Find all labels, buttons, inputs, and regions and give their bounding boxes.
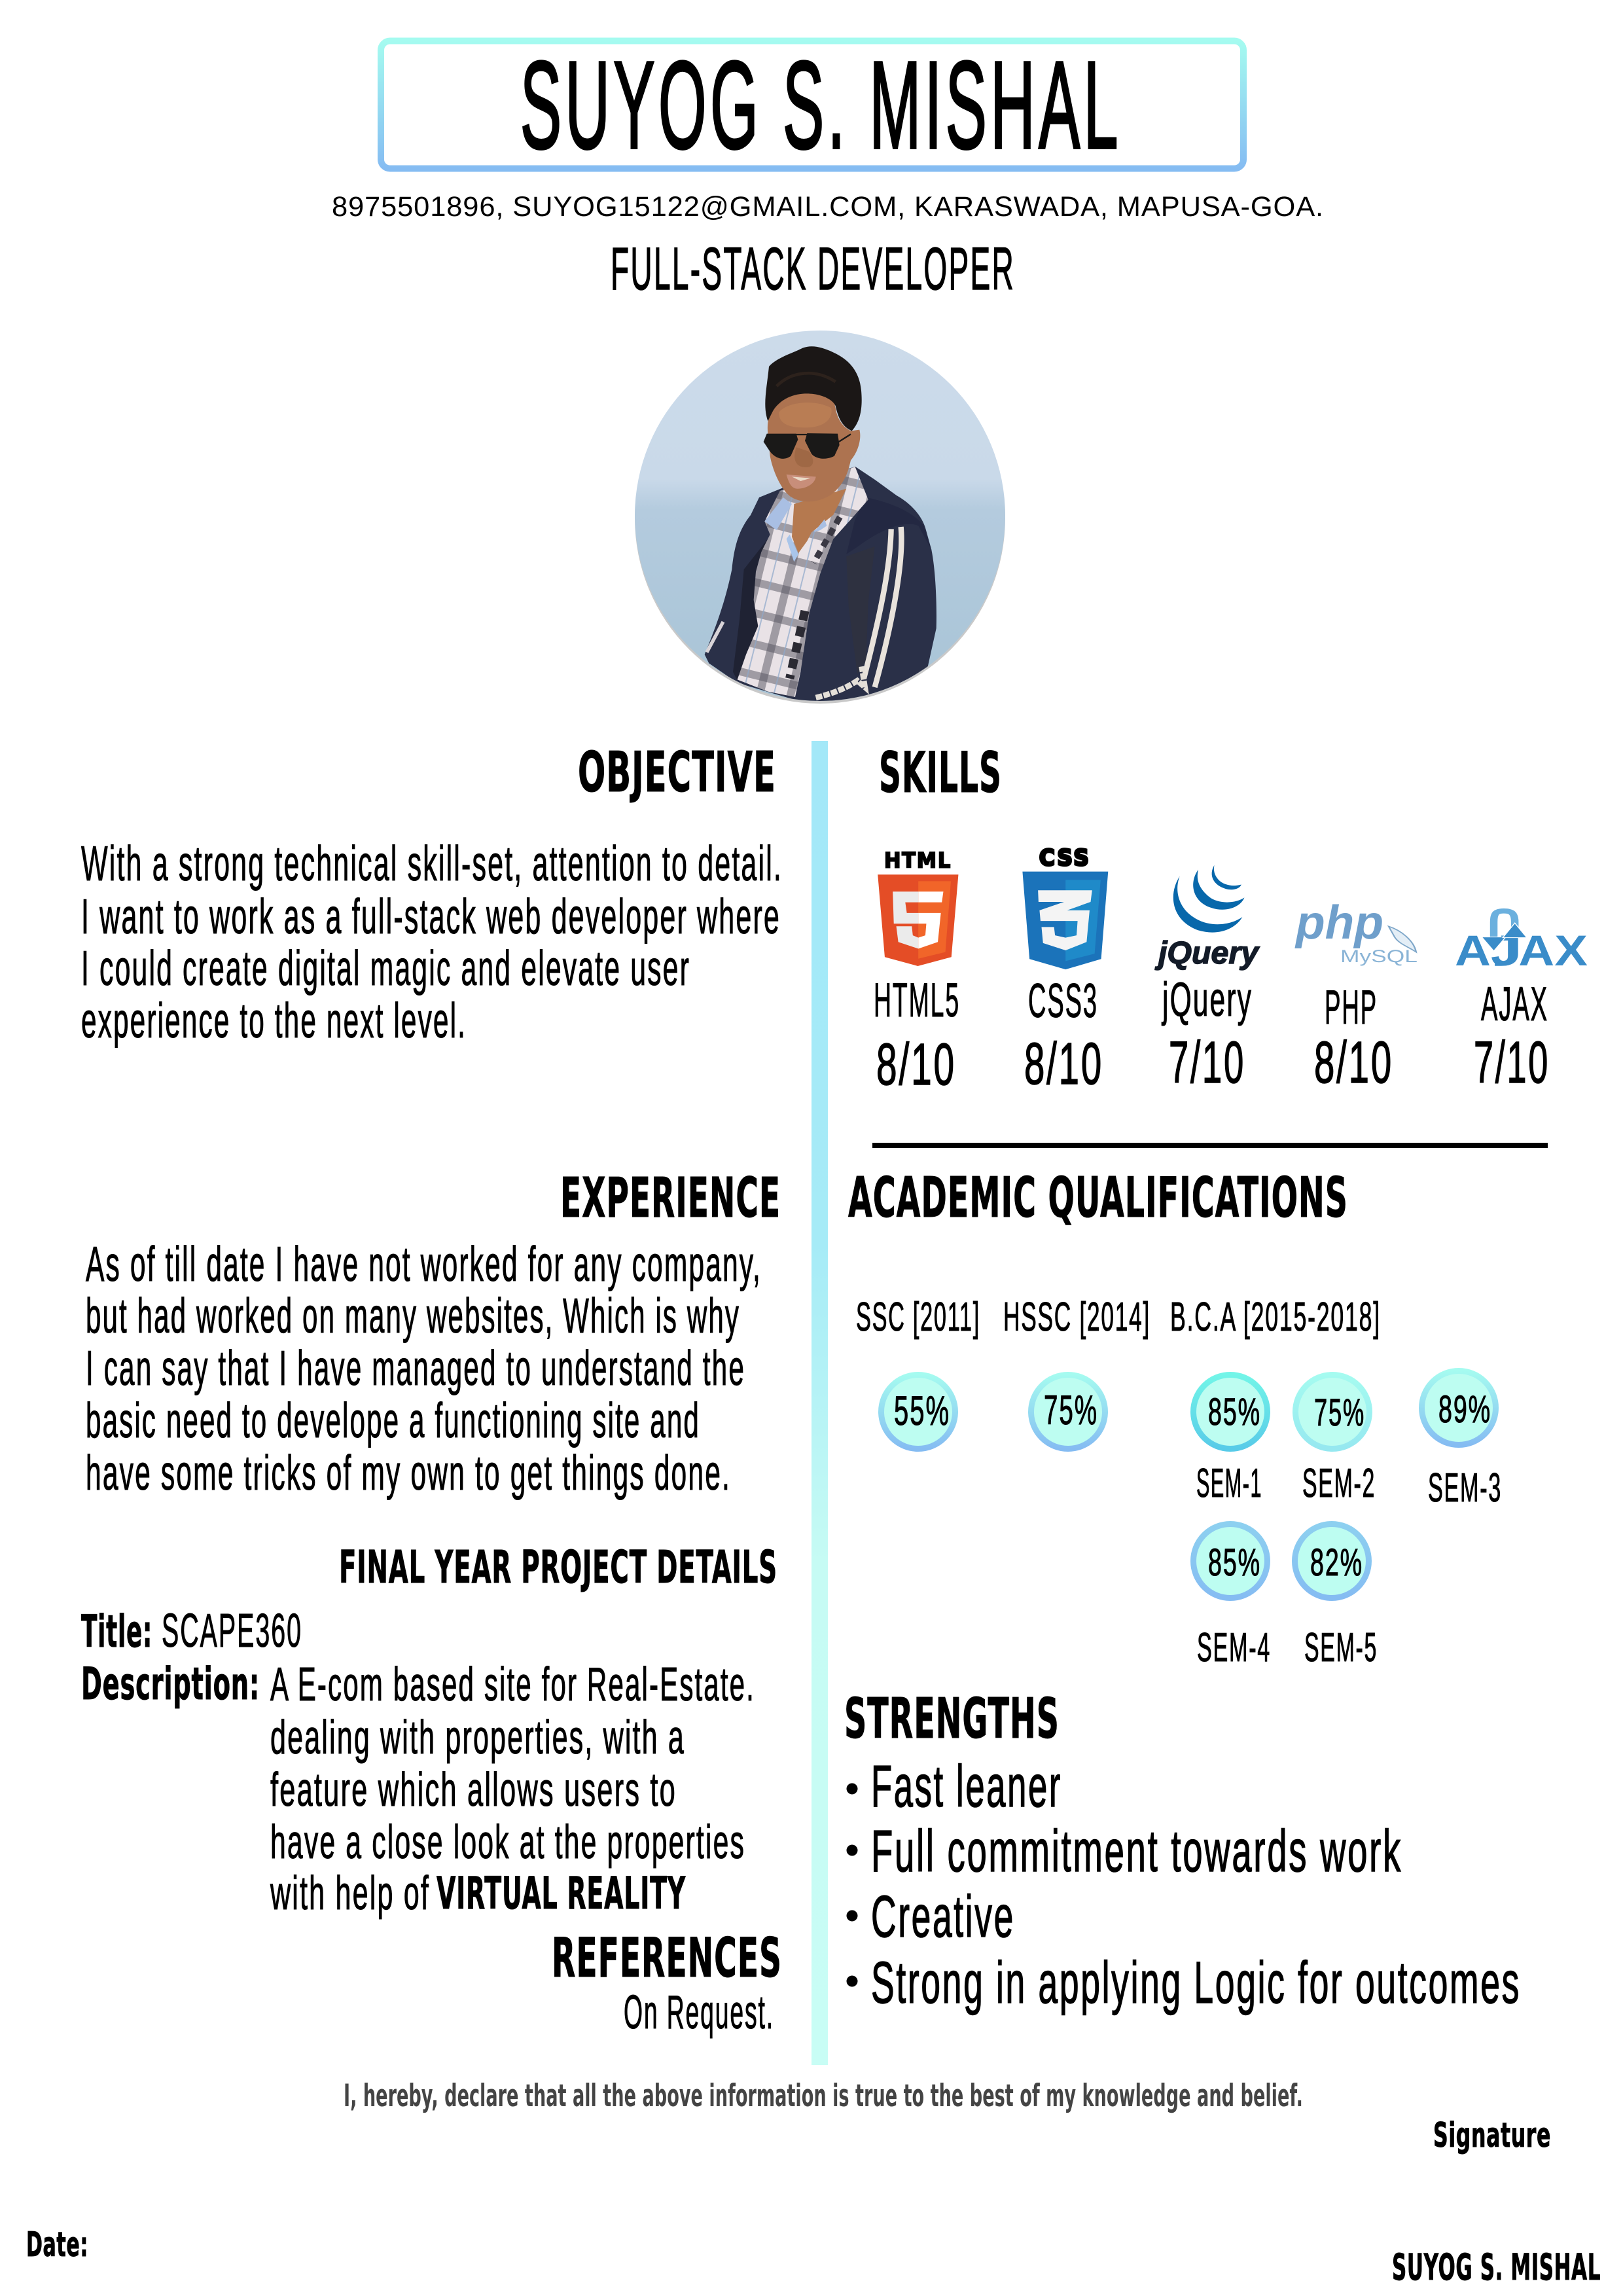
semester labels: SEM-1 bbox=[1196, 1461, 1262, 1506]
panel: experience bbox=[86, 1166, 781, 1500]
skill ratings: 7/10 bbox=[1169, 1030, 1245, 1096]
score badge: sem-3 bbox=[1421, 1371, 1496, 1445]
score badge: sem-4: 85% bbox=[1208, 1541, 1261, 1584]
heading: experience: EXPERIENCE bbox=[560, 1166, 781, 1230]
icon: ajax: AJAX bbox=[1455, 926, 1588, 975]
icon: ajax bbox=[1455, 911, 1588, 975]
skill ratings bbox=[876, 1030, 1550, 1098]
date label: Date: bbox=[26, 2225, 88, 2265]
semester labels: SEM-2 bbox=[1302, 1461, 1376, 1506]
icon: jquery bbox=[1154, 865, 1260, 971]
job title: FULL-STACK DEVELOPER bbox=[611, 236, 1015, 302]
objective text: I could create digital magic and elevate user bbox=[81, 941, 690, 996]
skill labels: CSS3 bbox=[1028, 975, 1098, 1028]
qualification labels: B.C.A [2015-2018] bbox=[1170, 1295, 1381, 1340]
project description: have a close look at the properties bbox=[270, 1816, 745, 1869]
project description: feature which allows users to bbox=[270, 1764, 677, 1816]
qualification labels: SSC [2011] bbox=[856, 1295, 980, 1340]
experience text: I can say that I have managed to understand the bbox=[86, 1340, 745, 1395]
icon: css3: CSS bbox=[1039, 845, 1091, 871]
semester labels: SEM-3 bbox=[1428, 1465, 1502, 1511]
score badge: sem-5: 82% bbox=[1310, 1541, 1363, 1584]
score badge: sem-2 bbox=[1296, 1374, 1369, 1449]
skill labels: jQuery bbox=[1162, 973, 1253, 1026]
icon: php mysql: MySQL bbox=[1340, 946, 1418, 966]
score badge: sem-1 bbox=[1194, 1374, 1267, 1449]
project title bbox=[81, 1605, 302, 1658]
objective text: I want to work as a full-stack web developer where bbox=[81, 889, 781, 944]
heading: skills: SKILLS bbox=[879, 740, 1002, 806]
skill labels: HTML5 bbox=[874, 974, 960, 1027]
objective text bbox=[81, 836, 783, 1048]
panel: references bbox=[552, 1926, 782, 2039]
qualification labels bbox=[856, 1295, 1381, 1340]
score badge: hssc: 75% bbox=[1044, 1388, 1098, 1433]
panel: objective bbox=[81, 740, 783, 1048]
skill ratings: 8/10 bbox=[876, 1032, 956, 1098]
score badge: sem-3: 89% bbox=[1438, 1388, 1491, 1431]
skill labels: PHP bbox=[1325, 981, 1378, 1034]
heading: final year project details: FINAL YEAR PROJECT DETAILS bbox=[339, 1541, 777, 1594]
score badge: sem-5 bbox=[1294, 1524, 1369, 1598]
objective text: experience to the next level. bbox=[81, 993, 467, 1048]
icon: jquery: jQuery bbox=[1154, 936, 1260, 971]
heading: references: REFERENCES bbox=[552, 1926, 782, 1990]
panel: strengths bbox=[844, 1687, 1521, 2016]
experience text: basic need to develope a functioning site and bbox=[86, 1393, 700, 1448]
score badge: sem-2: 75% bbox=[1314, 1391, 1365, 1434]
experience text bbox=[86, 1236, 762, 1500]
semester labels: SEM-5 bbox=[1304, 1625, 1378, 1670]
project description: A E-com based site for Real-Estate. bbox=[270, 1659, 755, 1711]
skill ratings: 7/10 bbox=[1474, 1030, 1550, 1096]
icon: css3 bbox=[1022, 845, 1108, 969]
objective text: With a strong technical skill-set, attention to detail. bbox=[81, 836, 783, 891]
semester labels: SEM-4 bbox=[1197, 1625, 1271, 1670]
panel: final year project bbox=[81, 1541, 777, 1920]
project description: Description: bbox=[81, 1659, 260, 1710]
qualification labels: HSSC [2014] bbox=[1003, 1295, 1150, 1340]
references text: On Request. bbox=[624, 1986, 774, 2039]
score badge: ssc: 55% bbox=[894, 1388, 950, 1434]
project description bbox=[81, 1659, 755, 1920]
score badge: ssc bbox=[881, 1374, 955, 1449]
project description: with help of bbox=[270, 1867, 430, 1920]
score badge: hssc bbox=[1031, 1374, 1105, 1449]
contact details: 8975501896, SUYOG15122@GMAIL.COM, KARASWADA, MAPUSA-GOA. bbox=[332, 191, 1324, 223]
icon: html5: HTML bbox=[884, 848, 952, 873]
strengths list bbox=[847, 1754, 1521, 2016]
panel: academic qualifications bbox=[848, 1166, 1502, 1670]
experience text: but had worked on many websites, Which is why bbox=[86, 1288, 740, 1343]
semester labels bbox=[1196, 1461, 1502, 1670]
project description: VIRTUAL REALITY bbox=[437, 1868, 686, 1920]
score badge: sem-1: 85% bbox=[1208, 1391, 1261, 1433]
icon: html5 bbox=[878, 848, 958, 966]
skill ratings: 8/10 bbox=[1314, 1030, 1393, 1096]
signature label: Signature bbox=[1433, 2116, 1551, 2155]
score badge: sem-4 bbox=[1194, 1524, 1267, 1598]
strengths list: Creative bbox=[871, 1884, 1015, 1950]
project title: SCAPE360 bbox=[162, 1605, 302, 1657]
portrait photo bbox=[628, 327, 1014, 707]
panel: skills bbox=[874, 740, 1588, 1098]
center divider bar bbox=[812, 741, 828, 2065]
project title: Title: bbox=[81, 1606, 152, 1658]
project description: dealing with properties, with a bbox=[270, 1712, 685, 1764]
skill ratings: 8/10 bbox=[1024, 1031, 1103, 1097]
header: name box bbox=[381, 36, 1243, 175]
icon: php mysql bbox=[1294, 897, 1418, 966]
experience text: As of till date I have not worked for any company, bbox=[86, 1236, 762, 1291]
experience text: have some tricks of my own to get things done. bbox=[86, 1445, 731, 1500]
skill labels bbox=[874, 973, 1548, 1034]
heading: objective: OBJECTIVE bbox=[578, 740, 776, 805]
strengths list: Fast leaner bbox=[871, 1754, 1062, 1820]
skill labels: AJAX bbox=[1481, 978, 1548, 1031]
heading: strengths: STRENGTHS bbox=[844, 1687, 1060, 1751]
icon: php mysql: php bbox=[1294, 897, 1383, 949]
